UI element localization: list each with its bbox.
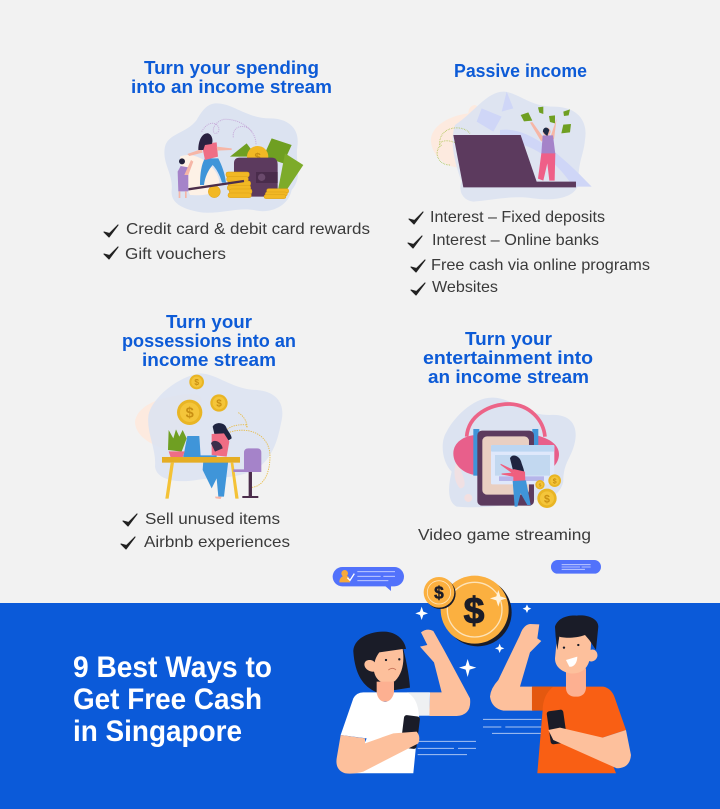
main title: in Singapore — [73, 715, 242, 748]
heading: possessions: Turn your — [166, 312, 252, 332]
heading: entertainment: Turn your — [465, 329, 552, 349]
checklist: passive income: Free cash via online programs — [431, 257, 650, 274]
checklist: possessions — [121, 511, 290, 551]
panel: entertainment — [418, 329, 593, 544]
illustration: tablet with headphones and coins: $ — [544, 493, 550, 505]
coin: small dollar: $ — [434, 583, 444, 603]
illustration: tablet with headphones and coins — [443, 398, 576, 508]
sparkles — [415, 604, 531, 677]
person: woman in white shirt — [336, 630, 470, 774]
heading: passive income: Passive income — [454, 61, 587, 81]
coin: large dollar: $ — [464, 589, 485, 631]
panel: passive income — [408, 61, 650, 296]
panel: spending — [104, 58, 370, 263]
main title: 9 Best Ways to — [73, 651, 272, 684]
heading: spending: Turn your spending — [144, 58, 319, 78]
checklist: spending: Credit card & debit card rewards — [126, 221, 370, 238]
heading: possessions: possessions into an — [122, 331, 296, 351]
heading: spending: into an income stream — [131, 77, 332, 97]
main title: Get Free Cash — [73, 683, 262, 716]
main title — [73, 651, 272, 748]
heading: entertainment: entertainment into — [423, 348, 593, 368]
speech bubble: left — [333, 567, 404, 591]
illustration: man on laptop throwing cash — [431, 92, 592, 202]
heading: possessions — [122, 312, 296, 370]
heading: entertainment — [423, 329, 593, 387]
checklist: passive income: Interest – Fixed deposits — [430, 209, 605, 226]
heading: possessions: income stream — [142, 350, 276, 370]
checklist: possessions: Sell unused items — [145, 511, 280, 528]
illustration: woman working at desk with coins: $ — [216, 399, 222, 410]
panel: possessions — [121, 312, 296, 551]
illustration: tablet with headphones and coins: $ — [553, 478, 557, 485]
illustration: woman balancing on coins and wallet: $ — [254, 152, 261, 164]
checklist: possessions: Airbnb experiences — [144, 534, 290, 551]
illustration: two people high-fiving with coins — [333, 560, 631, 774]
heading: spending — [131, 58, 332, 97]
checklist: passive income: Interest – Online banks — [432, 232, 599, 249]
heading: entertainment: an income stream — [428, 367, 589, 387]
speech bubble: right — [551, 560, 601, 574]
speed lines — [418, 719, 541, 755]
illustration: tablet with headphones and coins: $ — [539, 483, 542, 489]
checklist: passive income — [408, 209, 650, 296]
coin: large dollar — [441, 576, 512, 646]
coin: small dollar — [424, 577, 456, 609]
text: video game streaming: Video game streaming — [418, 527, 591, 544]
checklist: spending — [104, 221, 370, 263]
illustration: woman balancing on coins and wallet — [164, 103, 303, 213]
illustration: woman working at desk with coins: $ — [194, 377, 199, 387]
illustration: woman working at desk with coins — [135, 373, 282, 499]
checklist: spending: Gift vouchers — [125, 246, 226, 263]
banner: blue footer — [0, 603, 720, 809]
person: man in orange shirt — [490, 615, 631, 773]
illustration: woman working at desk with coins: $ — [186, 406, 194, 422]
checklist: passive income: Websites — [432, 279, 498, 296]
